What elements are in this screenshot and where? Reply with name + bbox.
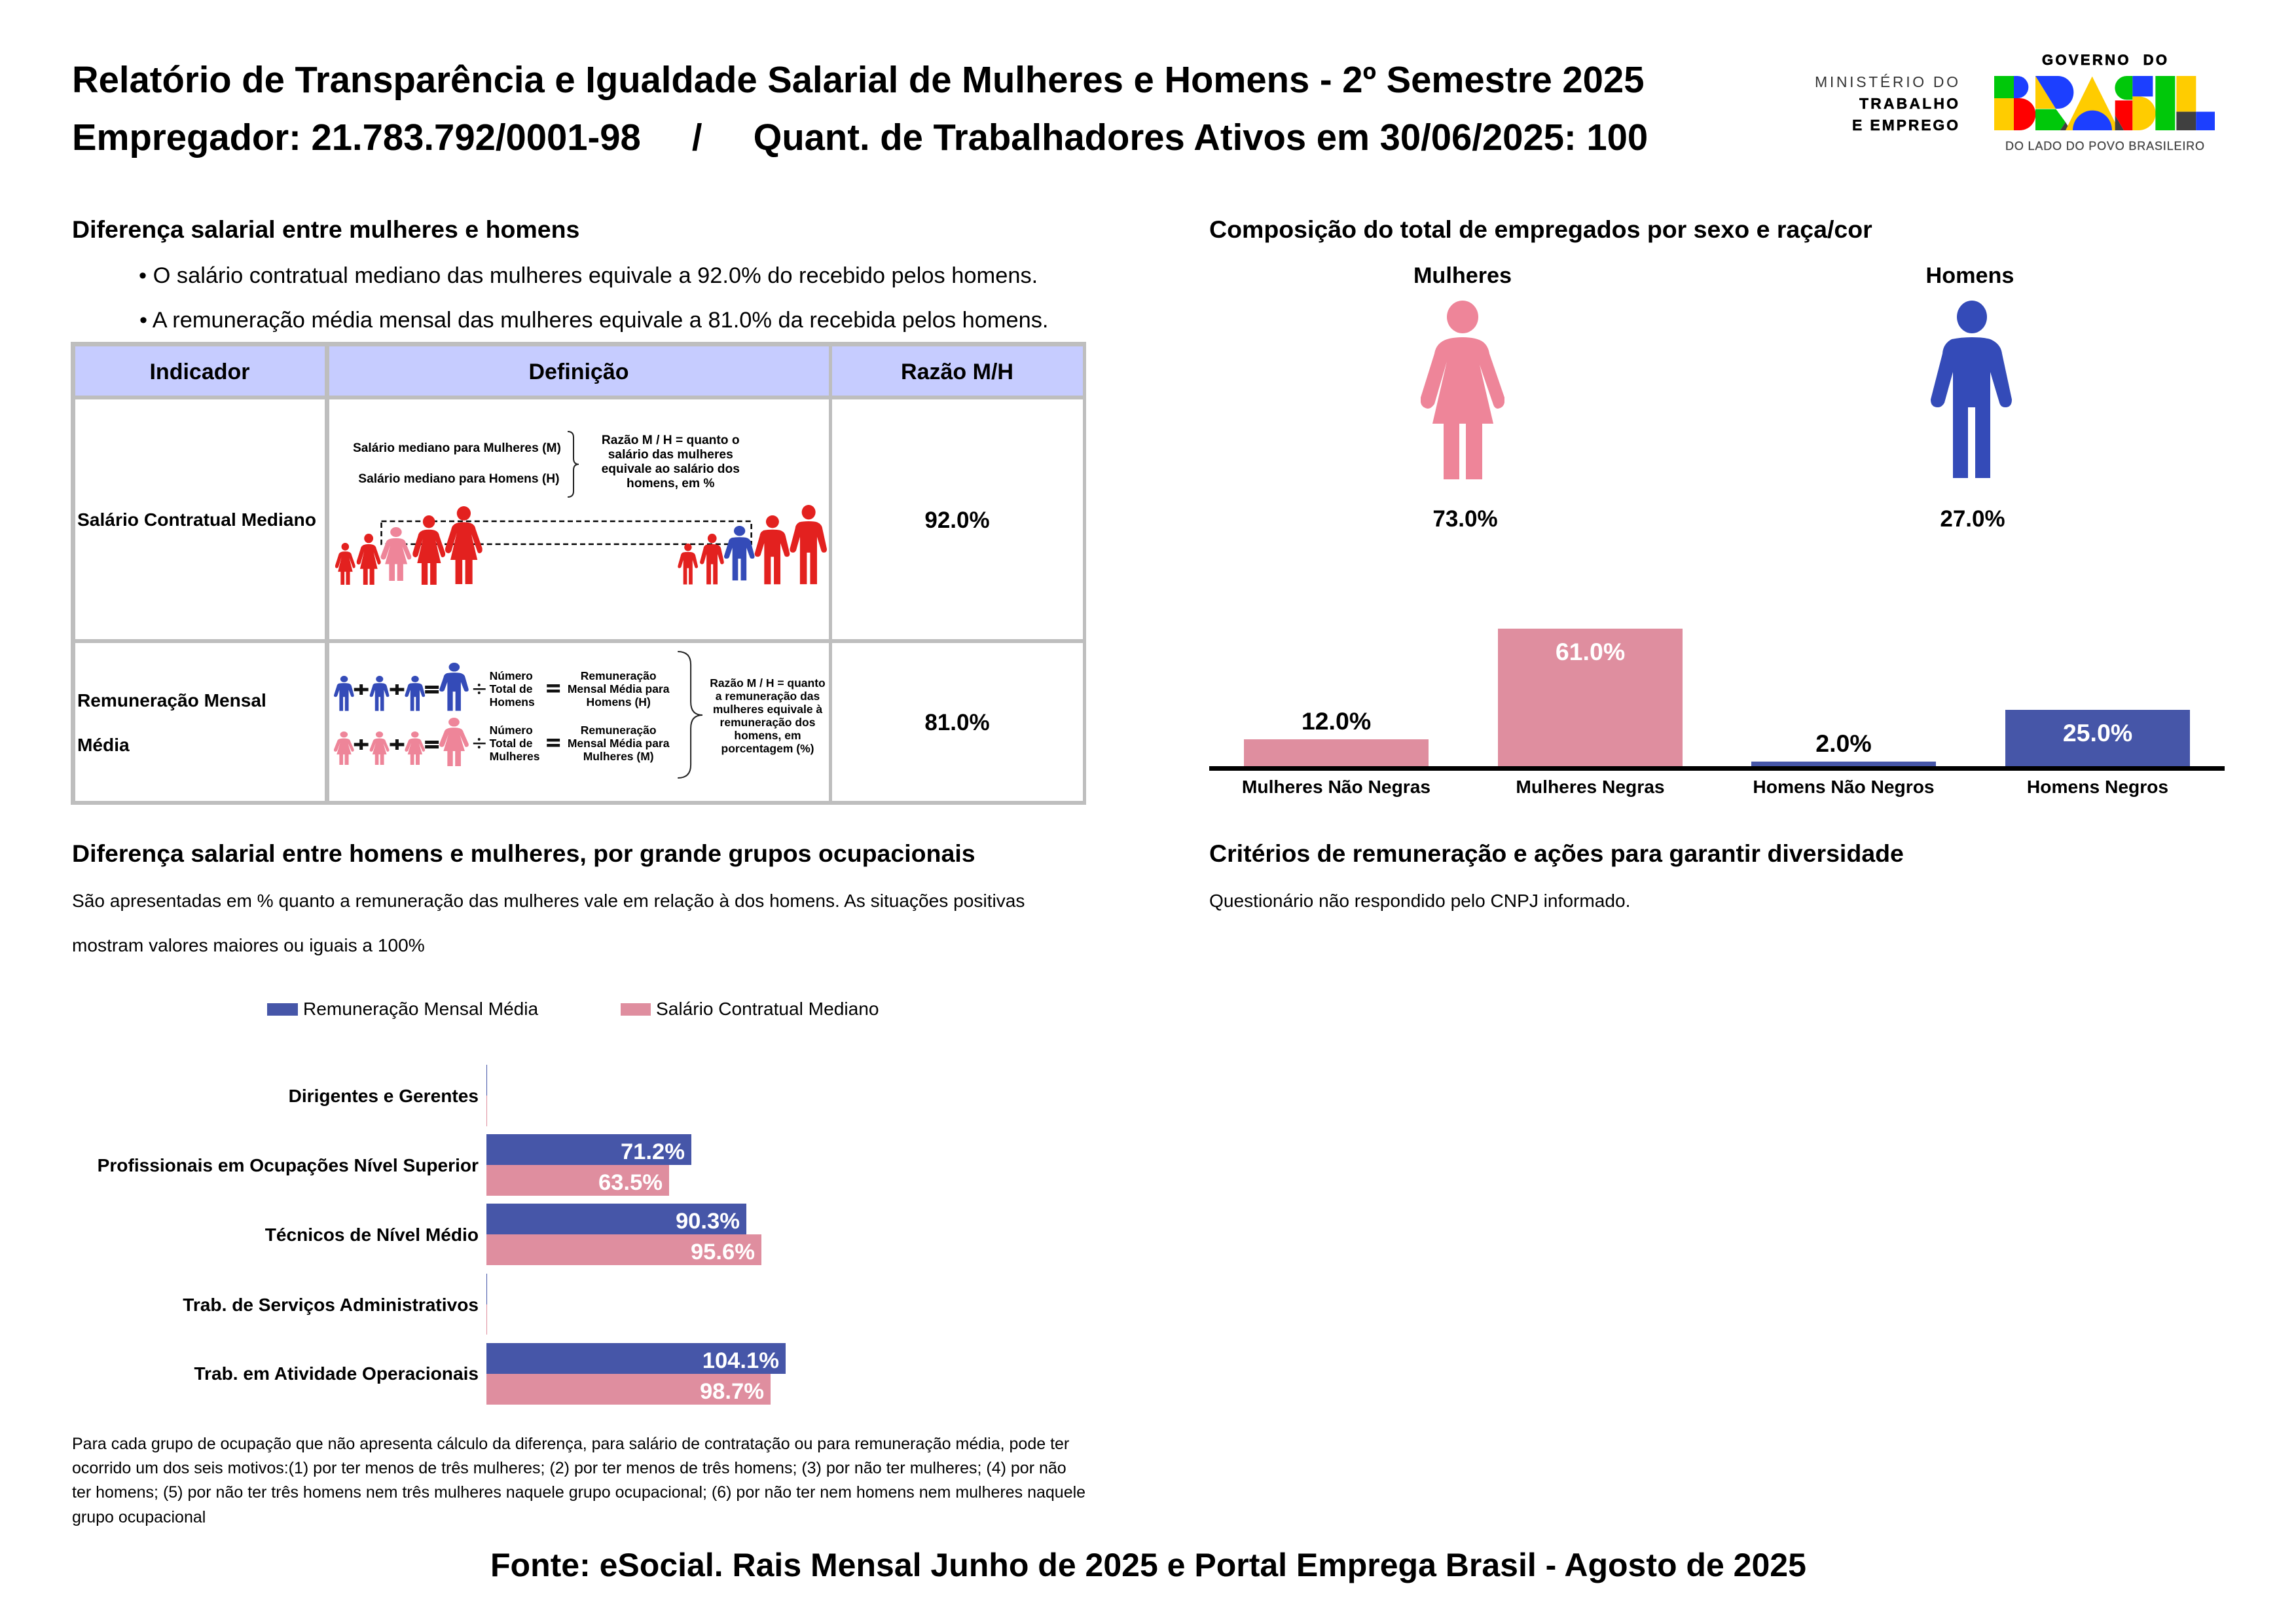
heading: diferença por grupos ocupacionais: Diferença salarial entre homens e mulheres, por grande grupos ocupacionais	[72, 840, 975, 867]
logo: governo do brasil: GOVERNO DO	[2042, 52, 2167, 68]
bar chart: composition by race: 2.0%	[1815, 729, 1872, 757]
intro text: São apresentadas em % quanto a remuneração das mulheres vale em relação à dos homens. As situações positivas	[72, 891, 1025, 911]
diagram: remuneração média	[334, 652, 826, 778]
bar chart: occupational groups: 104.1%	[702, 1348, 779, 1373]
diagram: remuneração média: a remuneração das	[716, 690, 820, 703]
bar chart: composition by race	[1209, 629, 2225, 797]
text: questionário: Questionário não respondido pelo CNPJ informado.	[1209, 891, 1630, 911]
diagram: remuneração média: porcentagem (%)	[721, 742, 814, 755]
logo: ministério do trabalho e emprego: E EMPREGO	[1852, 117, 1958, 134]
footnote: ter homens; (5) por não ter três homens nem três mulheres naquele grupo ocupacional; (6) por não ter nem homens nem mulheres naquele	[72, 1483, 1085, 1502]
bar chart: occupational groups: 95.6%	[691, 1240, 755, 1264]
bar chart: composition by race: 25.0%	[2063, 719, 2132, 747]
heading: diferença salarial: Diferença salarial entre mulheres e homens	[72, 215, 579, 243]
bar chart: composition by race: 12.0%	[1302, 707, 1371, 735]
logo: governo do brasil: DO LADO DO POVO BRASILEIRO	[2005, 139, 2204, 153]
diagram: salário mediano: salário das mulheres	[608, 448, 733, 462]
intro text: mostram valores maiores ou iguais a 100%	[72, 935, 425, 955]
diagram: remuneração média: Mulheres (M)	[583, 750, 654, 763]
source line: Fonte: eSocial. Rais Mensal Junho de 2025 e Portal Emprega Brasil - Agosto de 2025	[490, 1547, 1806, 1583]
diagram: salário mediano: Salário mediano para Mulheres (M)	[353, 441, 561, 455]
intro text	[72, 891, 1025, 955]
bullet text block: • O salário contratual mediano das mulheres equivale a 92.0% do recebido pelos homens.	[139, 263, 1038, 288]
diagram: remuneração média: Mensal Média para	[568, 682, 670, 695]
row value: 92.0%: 92.0%	[924, 507, 990, 533]
footnote: Para cada grupo de ocupação que não apresenta cálculo da diferença, para salário de contratação ou para remuneração média, pode ter	[72, 1435, 1069, 1453]
legend: Remuneração Mensal Média	[303, 999, 539, 1019]
logo: ministério do trabalho e emprego	[1815, 73, 1958, 134]
value: women share: 73.0%	[1432, 506, 1498, 532]
bar chart: occupational groups: Profissionais em Ocupações Nível Superior	[98, 1155, 479, 1175]
diagram: salário mediano: equivale ao salário dos	[602, 462, 740, 476]
diagram: remuneração média: Razão M / H = quanto	[710, 676, 826, 690]
diagram: remuneração média: mulheres equivale à	[713, 703, 822, 716]
diagram: remuneração média: Número	[490, 669, 533, 682]
table header: Razão M/H	[901, 360, 1013, 384]
bar chart: occupational groups: 71.2%	[621, 1139, 685, 1164]
diagram: salário mediano: homens, em %	[627, 477, 714, 490]
diagram: remuneração média: Homens (H)	[587, 695, 651, 709]
diagram: remuneração média: homens, em	[734, 729, 801, 742]
table header	[75, 346, 1083, 396]
bar chart: occupational groups	[98, 1065, 786, 1405]
legend	[267, 999, 879, 1019]
panel: table of indicators	[71, 342, 1086, 805]
title: Empregador: 21.783.792/0001-98 / Quant. de Trabalhadores Ativos em 30/06/2025: 100	[72, 117, 1648, 158]
bar chart: composition by race: Mulheres Não Negras	[1242, 776, 1430, 797]
title: Relatório de Transparência e Igualdade Salarial de Mulheres e Homens - 2º Semestre 2025	[72, 59, 1644, 100]
footnote: grupo ocupacional	[72, 1508, 206, 1526]
title	[72, 59, 1648, 158]
label: homens: Homens	[1926, 263, 2014, 288]
bullet text block: • A remuneração média mensal das mulheres equivale a 81.0% da recebida pelos homens.	[139, 308, 1049, 333]
table header: Definição	[528, 360, 629, 384]
value: men share: 27.0%	[1940, 506, 2005, 532]
legend: Salário Contratual Mediano	[656, 999, 879, 1019]
diagram: salário mediano: Salário mediano para Homens (H)	[358, 472, 560, 486]
bar chart: composition by race: 61.0%	[1556, 638, 1625, 665]
icon: woman	[1421, 301, 1504, 479]
diagram: remuneração média: Mensal Média para	[568, 737, 670, 750]
bullet text block	[139, 263, 1049, 333]
footnote: ocorrido um dos seis motivos:(1) por ter menos de três mulheres; (2) por ter menos de três homens; (3) por não ter mulheres; (4) por não	[72, 1459, 1066, 1477]
diagram: remuneração média: Total de	[490, 737, 533, 750]
diagram: remuneração média: Remuneração	[581, 724, 657, 737]
row value: 81.0%: 81.0%	[924, 710, 990, 735]
row label: remuneração mensal média	[77, 690, 266, 755]
bar chart: occupational groups: 63.5%	[598, 1170, 663, 1195]
diagram: remuneração média: Número	[490, 724, 533, 737]
diagram: remuneração média: Remuneração	[581, 669, 657, 682]
logo: ministério do trabalho e emprego: TRABALHO	[1859, 95, 1958, 112]
bar chart: occupational groups: Trab. em Atividade Operacionais	[194, 1363, 479, 1384]
logo: governo do brasil	[1994, 52, 2215, 153]
bar chart: occupational groups: Dirigentes e Gerentes	[289, 1086, 479, 1106]
diagram: salário mediano	[335, 432, 827, 585]
bar chart: occupational groups: 98.7%	[700, 1379, 764, 1404]
row label: remuneração mensal média: Remuneração Mensal	[77, 690, 266, 710]
diagram: remuneração média: Mulheres	[490, 750, 540, 763]
bar chart: composition by race: Mulheres Negras	[1516, 776, 1665, 797]
row label: salário contratual mediano: Salário Contratual Mediano	[77, 509, 316, 530]
diagram: remuneração média: Homens	[490, 695, 535, 709]
table header: Indicador	[149, 360, 250, 384]
diagram: salário mediano: Razão M / H = quanto o	[602, 434, 740, 447]
diagram: remuneração média: Total de	[490, 682, 533, 695]
bar chart: composition by race: Homens Negros	[2027, 776, 2168, 797]
heading: composição: Composição do total de empregados por sexo e raça/cor	[1209, 215, 1872, 243]
row label: remuneração mensal média: Média	[77, 735, 130, 755]
bar chart: occupational groups: Técnicos de Nível Médio	[265, 1225, 479, 1245]
diagram: remuneração média: remuneração dos	[720, 716, 816, 729]
label: mulheres: Mulheres	[1413, 263, 1512, 288]
icon: man	[1931, 301, 2012, 478]
bar chart: occupational groups: 90.3%	[676, 1209, 740, 1234]
bar chart: occupational groups: Trab. de Serviços Administrativos	[183, 1295, 479, 1315]
logo: ministério do trabalho e emprego: MINISTÉRIO DO	[1815, 73, 1958, 90]
footnote	[72, 1435, 1085, 1526]
heading: critérios de remuneração: Critérios de remuneração e ações para garantir diversidade	[1209, 840, 1904, 867]
bar chart: composition by race: Homens Não Negros	[1753, 776, 1935, 797]
